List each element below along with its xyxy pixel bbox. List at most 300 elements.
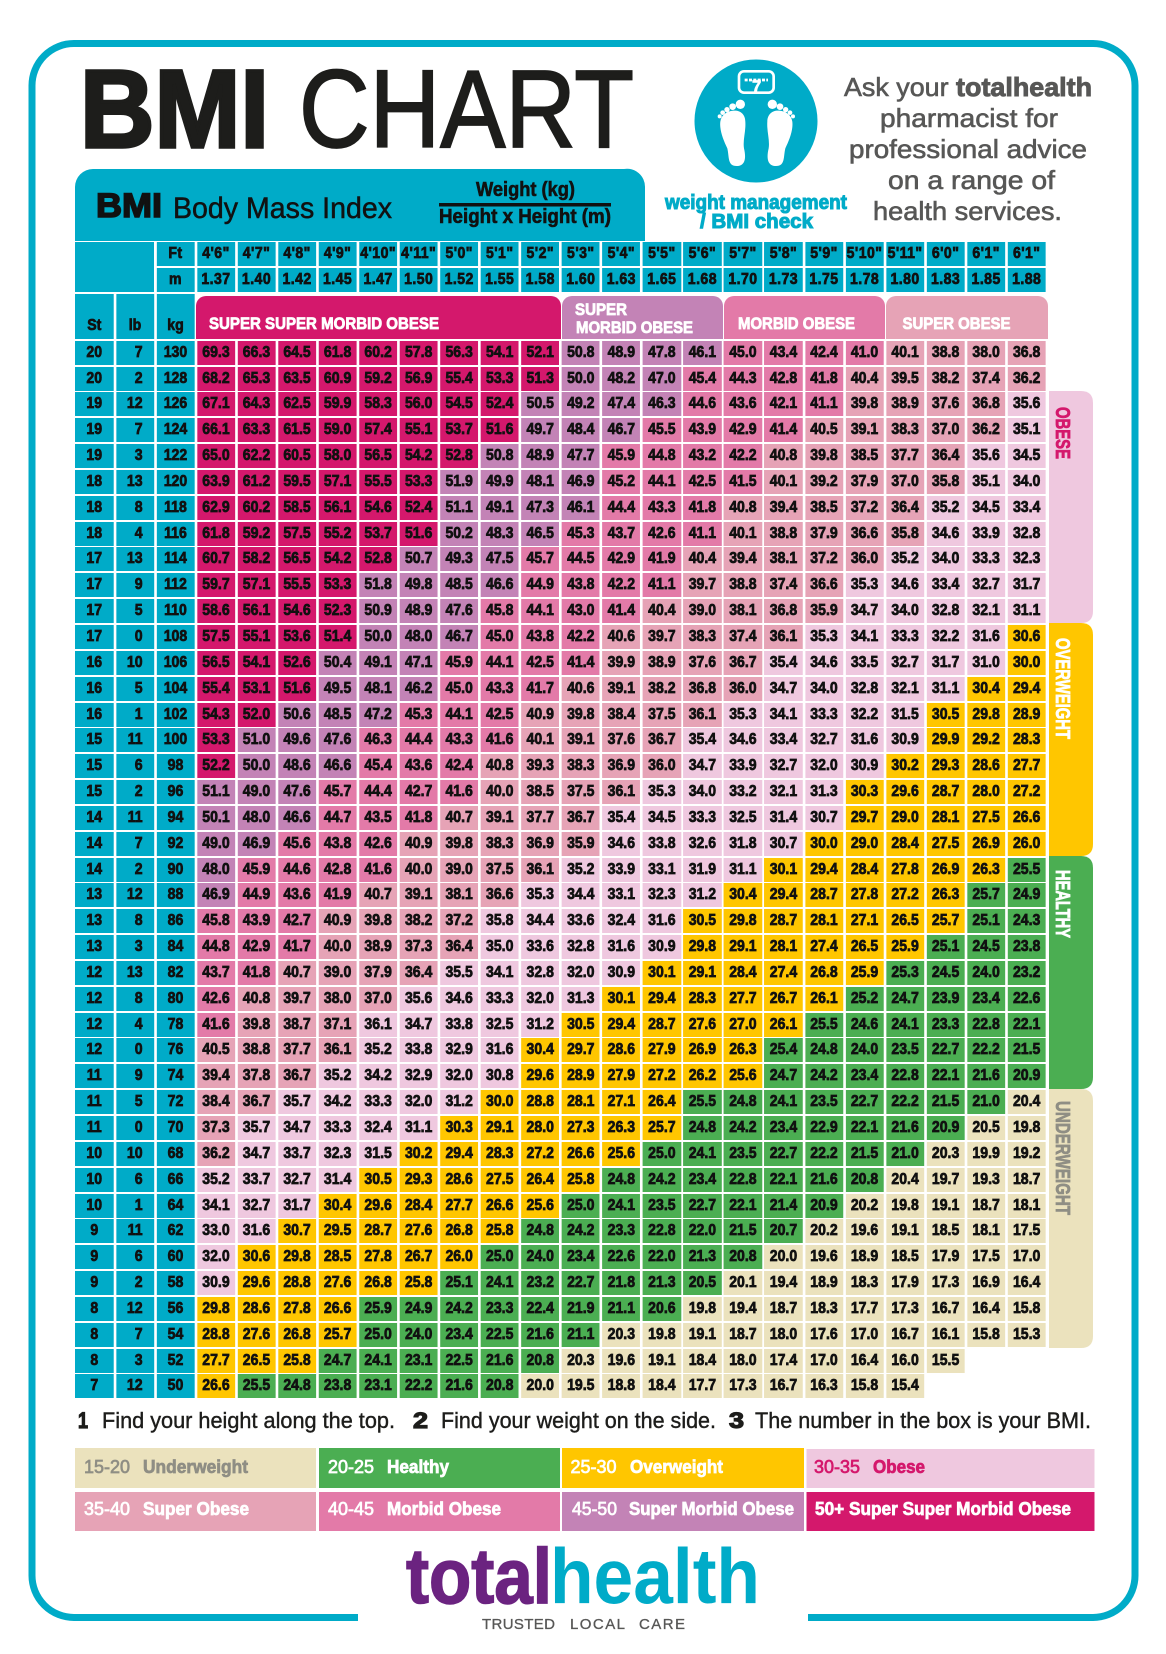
row: 110 kg: 45.8 — [486, 602, 513, 619]
row: 52 kg: 26.5 — [243, 1352, 270, 1369]
row: 50 kg: 26.6 — [202, 1377, 230, 1394]
row: 116 kg: 42.6 — [648, 525, 676, 542]
row: 72 kg: 38.4 — [202, 1093, 230, 1110]
text: 25.5 — [1013, 861, 1040, 878]
row: 50 kg: 24.8 — [283, 1377, 311, 1394]
row: 116 kg: 35.8 — [891, 525, 919, 542]
row: 126 kg: 43.6 — [729, 395, 757, 412]
row: 84 kg: 3 — [135, 938, 143, 955]
row: 116 kg: 51.6 — [405, 525, 432, 542]
row: 106 kg: 16 — [86, 654, 102, 671]
logo: totalhealth: total — [406, 1532, 552, 1620]
row: 70 kg: 37.3 — [202, 1119, 230, 1136]
row: 68 kg: 25.6 — [608, 1145, 635, 1162]
row: 130 kg: 38.8 — [932, 344, 959, 361]
row: 58 kg — [75, 1271, 990, 1295]
row: 104 kg: 34.7 — [770, 680, 797, 697]
row: 66 kg: 20.4 — [891, 1171, 919, 1188]
row: 112 kg: 48.5 — [445, 576, 473, 593]
row: 54 kg: 54 — [168, 1326, 183, 1343]
row: 82 kg: 28.4 — [729, 964, 757, 981]
row: 60 kg: 19.6 — [810, 1248, 838, 1265]
row: 92 kg: 30.7 — [770, 835, 797, 852]
row: 118 kg: 38.5 — [810, 499, 838, 516]
row: 84 kg: 31.6 — [608, 938, 635, 955]
row: 112 kg: 35.3 — [851, 576, 878, 593]
row: 66 kg: 30.5 — [364, 1171, 392, 1188]
row: feet: 5'0" — [445, 245, 473, 262]
row: 106 kg: 45.9 — [445, 654, 473, 671]
row: 66 kg: 19.3 — [972, 1171, 1000, 1188]
row: 52 kg: 23.1 — [405, 1352, 432, 1369]
row: 56 kg: 16.4 — [972, 1300, 1000, 1317]
column headers: St lb kg: lb — [129, 316, 141, 334]
row: 96 kg: 32.1 — [770, 783, 797, 800]
row: 108 kg: 31.6 — [972, 628, 1000, 645]
row: feet: 5'11" — [888, 245, 923, 262]
row: 126 kg — [75, 392, 1046, 416]
row: 118 kg: 62.9 — [202, 499, 230, 516]
row: 54 kg: 20.3 — [608, 1326, 635, 1343]
row: 54 kg: 8 — [90, 1326, 98, 1343]
row: 120 kg: 63.9 — [202, 473, 230, 490]
row: 68 kg: 22.7 — [770, 1145, 797, 1162]
legend: super super morbid obese — [806, 1492, 1094, 1531]
row: 70 kg: 27.3 — [567, 1119, 594, 1136]
row: 96 kg: 28.7 — [932, 783, 959, 800]
row: 110 kg: 35.9 — [810, 602, 838, 619]
row: 76 kg: 22.2 — [972, 1041, 1000, 1058]
row: 78 kg: 37.1 — [324, 1016, 351, 1033]
row: 76 kg: 0 — [135, 1041, 143, 1058]
row: feet: 5'1" — [486, 245, 513, 262]
row: 64 kg: 22.7 — [689, 1197, 716, 1214]
row: 62 kg: 18.1 — [972, 1222, 1000, 1239]
row: 70 kg: 22.1 — [851, 1119, 878, 1136]
row: 64 kg: 27.7 — [445, 1197, 473, 1214]
row: 50 kg: 16.3 — [810, 1377, 838, 1394]
text: 33.4 — [1013, 499, 1040, 516]
row: 98 kg: 45.4 — [364, 757, 392, 774]
row: 104 kg: 16 — [86, 680, 102, 697]
row: 52 kg: 22.5 — [445, 1352, 473, 1369]
row: 74 kg: 22.1 — [932, 1067, 959, 1084]
row: 106 kg: 10 — [127, 654, 143, 671]
row: 60 kg: 17.9 — [932, 1248, 959, 1265]
row: 118 kg: 37.2 — [851, 499, 878, 516]
row: 118 kg: 36.4 — [891, 499, 919, 516]
row: 92 kg: 46.9 — [243, 835, 270, 852]
row: 74 kg: 32.0 — [445, 1067, 473, 1084]
row: 126 kg: 58.3 — [364, 395, 392, 412]
row: 118 kg: 47.3 — [527, 499, 554, 516]
row: 84 kg: 26.5 — [851, 938, 878, 955]
row: 96 kg: 41.6 — [445, 783, 473, 800]
row: 84 kg: 37.3 — [405, 938, 432, 955]
row: metres: 1.60 — [566, 271, 595, 288]
row: 86 kg: 28.1 — [810, 912, 838, 929]
row: 116 kg: 38.8 — [770, 525, 797, 542]
row: 70 kg: 28.0 — [527, 1119, 554, 1136]
row: 52 kg: 20.8 — [527, 1352, 554, 1369]
row: 62 kg: 24.8 — [527, 1222, 554, 1239]
row: 90 kg: 26.3 — [972, 861, 1000, 878]
row: 70 kg: 20.9 — [932, 1119, 959, 1136]
row: 88 kg: 32.3 — [648, 886, 676, 903]
row: 62 kg: 22.8 — [648, 1222, 676, 1239]
text: 32.3 — [1013, 550, 1040, 567]
row: 124 kg: 53.7 — [445, 421, 473, 438]
row: 60 kg: 6 — [135, 1248, 143, 1265]
row: 106 kg: 31.7 — [932, 654, 959, 671]
row: 94 kg: 29.7 — [851, 809, 878, 826]
row: 84 kg: 44.8 — [202, 938, 230, 955]
row: 78 kg — [75, 1013, 1046, 1037]
row: metres: 1.68 — [688, 271, 717, 288]
side tab: underweight — [1049, 1089, 1093, 1348]
row: 94 kg: 29.0 — [891, 809, 919, 826]
row: 122 kg: 48.9 — [527, 447, 554, 464]
row: 124 kg: 43.9 — [689, 421, 716, 438]
column headers: St lb kg: kg — [167, 316, 184, 334]
text: 32.8 — [1013, 525, 1040, 542]
tagline: CARE — [639, 1616, 685, 1633]
row: 114 kg: 52.8 — [364, 550, 392, 567]
row: 82 kg: 26.8 — [810, 964, 838, 981]
row: 62 kg: 29.5 — [324, 1222, 351, 1239]
row: 64 kg: 1 — [135, 1197, 143, 1214]
row: 98 kg: 39.3 — [527, 757, 554, 774]
row: 84 kg: 32.8 — [567, 938, 594, 955]
row: 76 kg: 22.7 — [932, 1041, 959, 1058]
row: 104 kg: 38.2 — [648, 680, 676, 697]
row: 54 kg: 7 — [135, 1326, 143, 1343]
row: 62 kg: 18.5 — [932, 1222, 959, 1239]
row: 82 kg: 35.5 — [445, 964, 473, 981]
row: 102 kg: 32.2 — [851, 706, 878, 722]
row: 120 kg: 35.8 — [932, 473, 959, 490]
row: 92 kg — [75, 832, 1046, 856]
row: 92 kg: 28.4 — [891, 835, 919, 852]
text: 30.6 — [1013, 628, 1040, 645]
text: 31.1 — [1013, 602, 1040, 619]
row: 112 kg: 46.6 — [486, 576, 513, 593]
row: 82 kg: 32.0 — [567, 964, 594, 981]
row: 66 kg: 29.3 — [405, 1171, 432, 1188]
row: 116 kg: 4 — [135, 525, 143, 542]
legend: obese — [806, 1449, 1094, 1488]
row: 94 kg: 43.5 — [364, 809, 392, 826]
text: 23.8 — [1013, 938, 1040, 955]
row: 66 kg: 24.8 — [608, 1171, 635, 1188]
row: 122 kg: 54.2 — [405, 447, 432, 464]
legend: underweight: 15-20 — [84, 1457, 130, 1477]
row: 130 kg: 52.1 — [527, 344, 554, 361]
row: 54 kg — [75, 1323, 990, 1347]
row: 98 kg: 38.3 — [567, 757, 594, 774]
row: 80 kg: 23.4 — [972, 990, 1000, 1007]
text: 22.1 — [1013, 1016, 1040, 1033]
side tab: healthy — [1049, 856, 1093, 1089]
row: 100 kg: 31.6 — [851, 731, 878, 748]
row: 130 kg: 64.5 — [283, 344, 311, 361]
row: 62 kg — [75, 1219, 1046, 1243]
row: 130 kg: 40.1 — [891, 344, 919, 361]
row: 68 kg: 34.7 — [243, 1145, 270, 1162]
row: 82 kg: 41.8 — [243, 964, 270, 981]
row: 90 kg: 29.4 — [810, 861, 838, 878]
row: metres: 1.37 — [201, 271, 231, 288]
row: 54 kg: 24.0 — [405, 1326, 432, 1343]
text: 20.9 — [1013, 1067, 1040, 1084]
row: 56 kg: 17.3 — [891, 1300, 919, 1317]
row: 90 kg: 2 — [135, 861, 143, 878]
row: 58 kg: 29.6 — [243, 1274, 270, 1291]
row: 86 kg: 37.2 — [445, 912, 473, 929]
row: 88 kg: 33.1 — [608, 886, 635, 903]
row: 102 kg: 48.5 — [324, 706, 351, 722]
row: 86 kg: 40.9 — [324, 912, 351, 929]
text: 34.0 — [1013, 473, 1040, 490]
row: 56 kg: 18.7 — [770, 1300, 797, 1317]
row: metres: 1.50 — [404, 271, 433, 288]
row: 56 kg: 27.8 — [283, 1300, 311, 1317]
tagline: LOCAL — [570, 1616, 625, 1633]
row: 120 kg: 59.5 — [283, 473, 311, 490]
row: 88 kg: 13 — [86, 886, 102, 903]
row: 66 kg: 35.2 — [202, 1171, 230, 1188]
row: 60 kg: 18.9 — [851, 1248, 878, 1265]
row: 124 kg: 42.9 — [729, 421, 757, 438]
row: 84 kg: 29.8 — [689, 938, 716, 955]
row: feet: 4'11" — [401, 245, 436, 262]
row: 122 kg: 56.5 — [364, 447, 392, 464]
heading: BMI Body Mass Index: BMI — [96, 187, 162, 225]
row: 86 kg: 35.8 — [486, 912, 513, 929]
row: 64 kg: 18.7 — [972, 1197, 1000, 1214]
row: 114 kg: 42.9 — [608, 550, 635, 567]
row: 114 kg: 40.4 — [689, 550, 716, 567]
row: 114 kg: 35.2 — [891, 550, 919, 567]
row: 62 kg: 24.2 — [567, 1222, 594, 1239]
row: 108 kg — [75, 625, 1046, 649]
row: 92 kg: 31.8 — [729, 835, 757, 852]
row: 96 kg: 15 — [86, 783, 102, 800]
row: 124 kg: 37.0 — [932, 421, 959, 438]
row: 68 kg: 10 — [127, 1145, 143, 1162]
row: 108 kg: 38.3 — [689, 628, 716, 645]
side tab: obese — [1049, 391, 1093, 623]
row: 66 kg: 25.8 — [567, 1171, 594, 1188]
row: metres: 1.78 — [850, 271, 879, 288]
row: 88 kg: 26.3 — [932, 886, 959, 903]
row: 88 kg: 12 — [127, 886, 143, 903]
row: 60 kg: 28.5 — [324, 1248, 351, 1265]
row: 114 kg: 50.7 — [405, 550, 432, 567]
row: 62 kg: 19.1 — [891, 1222, 919, 1239]
row: 122 kg: 43.2 — [689, 447, 716, 464]
row: 118 kg: 52.4 — [405, 499, 432, 516]
row: 94 kg: 36.7 — [567, 809, 594, 826]
formula — [439, 179, 611, 228]
row: 84 kg: 13 — [86, 938, 102, 955]
row: 88 kg: 30.4 — [729, 886, 757, 903]
row: 128 kg: 40.4 — [851, 370, 878, 387]
row: 124 kg: 51.6 — [486, 421, 513, 438]
row: 102 kg: 16 — [86, 706, 102, 722]
row: feet: 5'6" — [689, 245, 716, 262]
row: 52 kg: 25.8 — [283, 1352, 311, 1369]
row: 94 kg: 37.7 — [527, 809, 554, 826]
instructions: 1 — [78, 1408, 88, 1433]
row: 58 kg: 28.8 — [283, 1274, 311, 1291]
row: 114 kg: 41.9 — [648, 550, 676, 567]
row: 76 kg: 32.9 — [445, 1041, 473, 1058]
legend: morbid obese: 40-45 — [328, 1499, 374, 1519]
row: 126 kg: 12 — [127, 395, 143, 412]
row: 96 kg: 37.5 — [567, 783, 594, 800]
row: 78 kg: 24.1 — [891, 1016, 919, 1033]
row: 102 kg: 42.5 — [486, 706, 513, 722]
row: 116 kg — [75, 522, 1046, 546]
row: 70 kg: 23.4 — [770, 1119, 797, 1136]
row: 98 kg: 36.9 — [608, 757, 635, 774]
row: metres: 1.52 — [445, 271, 474, 288]
row: 68 kg: 29.4 — [445, 1145, 473, 1162]
row: 76 kg: 24.0 — [851, 1041, 878, 1058]
row: 92 kg: 92 — [168, 835, 183, 852]
row: 74 kg: 25.6 — [729, 1067, 757, 1084]
row: 56 kg: 19.8 — [689, 1300, 716, 1317]
row: 128 kg: 53.3 — [486, 370, 513, 387]
icon: scales with feet — [694, 60, 818, 182]
legend: obese: 30-35 — [814, 1457, 860, 1477]
row: 80 kg: 32.0 — [527, 990, 554, 1007]
row: 100 kg: 40.1 — [527, 731, 554, 748]
row: 124 kg: 124 — [164, 421, 187, 438]
row: 78 kg: 23.3 — [932, 1016, 959, 1033]
row: 92 kg: 33.8 — [648, 835, 676, 852]
row: 118 kg: 46.1 — [567, 499, 594, 516]
row: 72 kg: 21.5 — [932, 1093, 959, 1110]
row: 104 kg: 36.8 — [689, 680, 716, 697]
row: 78 kg: 27.6 — [689, 1016, 716, 1033]
row: 128 kg: 20 — [86, 370, 102, 387]
BMI data table — [75, 341, 1046, 1398]
row: 66 kg: 19.7 — [932, 1171, 959, 1188]
row: 82 kg: 82 — [168, 964, 183, 981]
row: 88 kg: 31.2 — [689, 886, 716, 903]
row: 68 kg: 19.9 — [972, 1145, 1000, 1162]
row: 58 kg: 21.8 — [608, 1274, 635, 1291]
row: 100 kg: 30.9 — [891, 731, 919, 748]
row: 82 kg: 40.7 — [283, 964, 311, 981]
row: 116 kg: 116 — [164, 525, 187, 542]
row: 64 kg: 23.5 — [648, 1197, 676, 1214]
row: 86 kg: 45.8 — [202, 912, 230, 929]
row: 94 kg: 31.4 — [770, 809, 797, 826]
row: 122 kg: 40.8 — [770, 447, 797, 464]
row: 124 kg: 45.5 — [648, 421, 676, 438]
row: 118 kg: 51.1 — [445, 499, 473, 516]
row: 86 kg: 30.5 — [689, 912, 716, 929]
row: 68 kg — [75, 1142, 1046, 1166]
row: 76 kg: 76 — [168, 1041, 183, 1058]
row: 90 kg: 48.0 — [202, 861, 230, 878]
row: 86 kg: 25.7 — [932, 912, 959, 929]
row: 108 kg: 45.0 — [486, 628, 513, 645]
row: 104 kg: 5 — [135, 680, 143, 697]
row: 96 kg: 35.3 — [648, 783, 676, 800]
row: metres: 1.80 — [890, 271, 920, 288]
row: metres: 1.58 — [526, 271, 555, 288]
text: 20.4 — [1013, 1093, 1040, 1110]
row: 88 kg: 38.1 — [445, 886, 473, 903]
row: feet: 5'9" — [810, 245, 838, 262]
row: 90 kg: 42.8 — [324, 861, 351, 878]
row: 54 kg: 25.0 — [364, 1326, 392, 1343]
row: 96 kg: 31.3 — [810, 783, 838, 800]
row: 80 kg: 37.0 — [364, 990, 392, 1007]
row: 72 kg: 28.8 — [527, 1093, 554, 1110]
legend: super obese: Super Obese — [143, 1499, 249, 1519]
row: 112 kg: 9 — [135, 576, 143, 593]
text: 23.2 — [1013, 964, 1040, 981]
row: 66 kg: 22.8 — [729, 1171, 757, 1188]
row: 124 kg: 41.4 — [770, 421, 797, 438]
row: 56 kg: 16.7 — [932, 1300, 959, 1317]
row: 52 kg: 16.0 — [891, 1352, 919, 1369]
row: 70 kg: 29.1 — [486, 1119, 513, 1136]
row: 100 kg: 47.6 — [324, 731, 351, 748]
row: 74 kg: 9 — [135, 1067, 143, 1084]
row: 84 kg: 36.4 — [445, 938, 473, 955]
row: 56 kg: 12 — [127, 1300, 143, 1317]
row: 100 kg: 100 — [164, 731, 187, 748]
row: 58 kg: 18.3 — [851, 1274, 878, 1291]
row: 118 kg: 40.8 — [729, 499, 757, 516]
row: 100 kg: 49.6 — [283, 731, 311, 748]
row: 118 kg: 35.2 — [932, 499, 959, 516]
row: 72 kg: 25.5 — [689, 1093, 716, 1110]
row: 56 kg: 23.3 — [486, 1300, 513, 1317]
row: 52 kg: 27.7 — [202, 1352, 230, 1369]
row: 96 kg: 47.6 — [283, 783, 311, 800]
row: 74 kg: 24.2 — [810, 1067, 838, 1084]
row: 112 kg: 55.5 — [283, 576, 311, 593]
row: 130 kg: 42.4 — [810, 344, 838, 361]
row: 54 kg: 17.6 — [810, 1326, 838, 1343]
row: 116 kg: 36.6 — [851, 525, 878, 542]
row: 70 kg — [75, 1116, 1046, 1140]
legend: super obese: 35-40 — [84, 1499, 130, 1519]
row: 52 kg: 15.5 — [932, 1352, 959, 1369]
row: 130 kg: 41.0 — [851, 344, 878, 361]
row: 122 kg: 36.4 — [932, 447, 959, 464]
row: 94 kg: 44.7 — [324, 809, 351, 826]
row: 66 kg: 22.1 — [770, 1171, 797, 1188]
row: 58 kg: 16.9 — [972, 1274, 1000, 1291]
row: 86 kg: 34.4 — [527, 912, 554, 929]
row: 68 kg: 30.2 — [405, 1145, 432, 1162]
row: feet: 5'2" — [527, 245, 554, 262]
row: 90 kg: 14 — [86, 861, 102, 878]
row: 94 kg: 40.7 — [445, 809, 473, 826]
row: 122 kg — [75, 444, 1046, 468]
row: 114 kg: 37.2 — [810, 550, 838, 567]
row: 62 kg: 62 — [168, 1222, 183, 1239]
row: 92 kg: 45.6 — [283, 835, 311, 852]
